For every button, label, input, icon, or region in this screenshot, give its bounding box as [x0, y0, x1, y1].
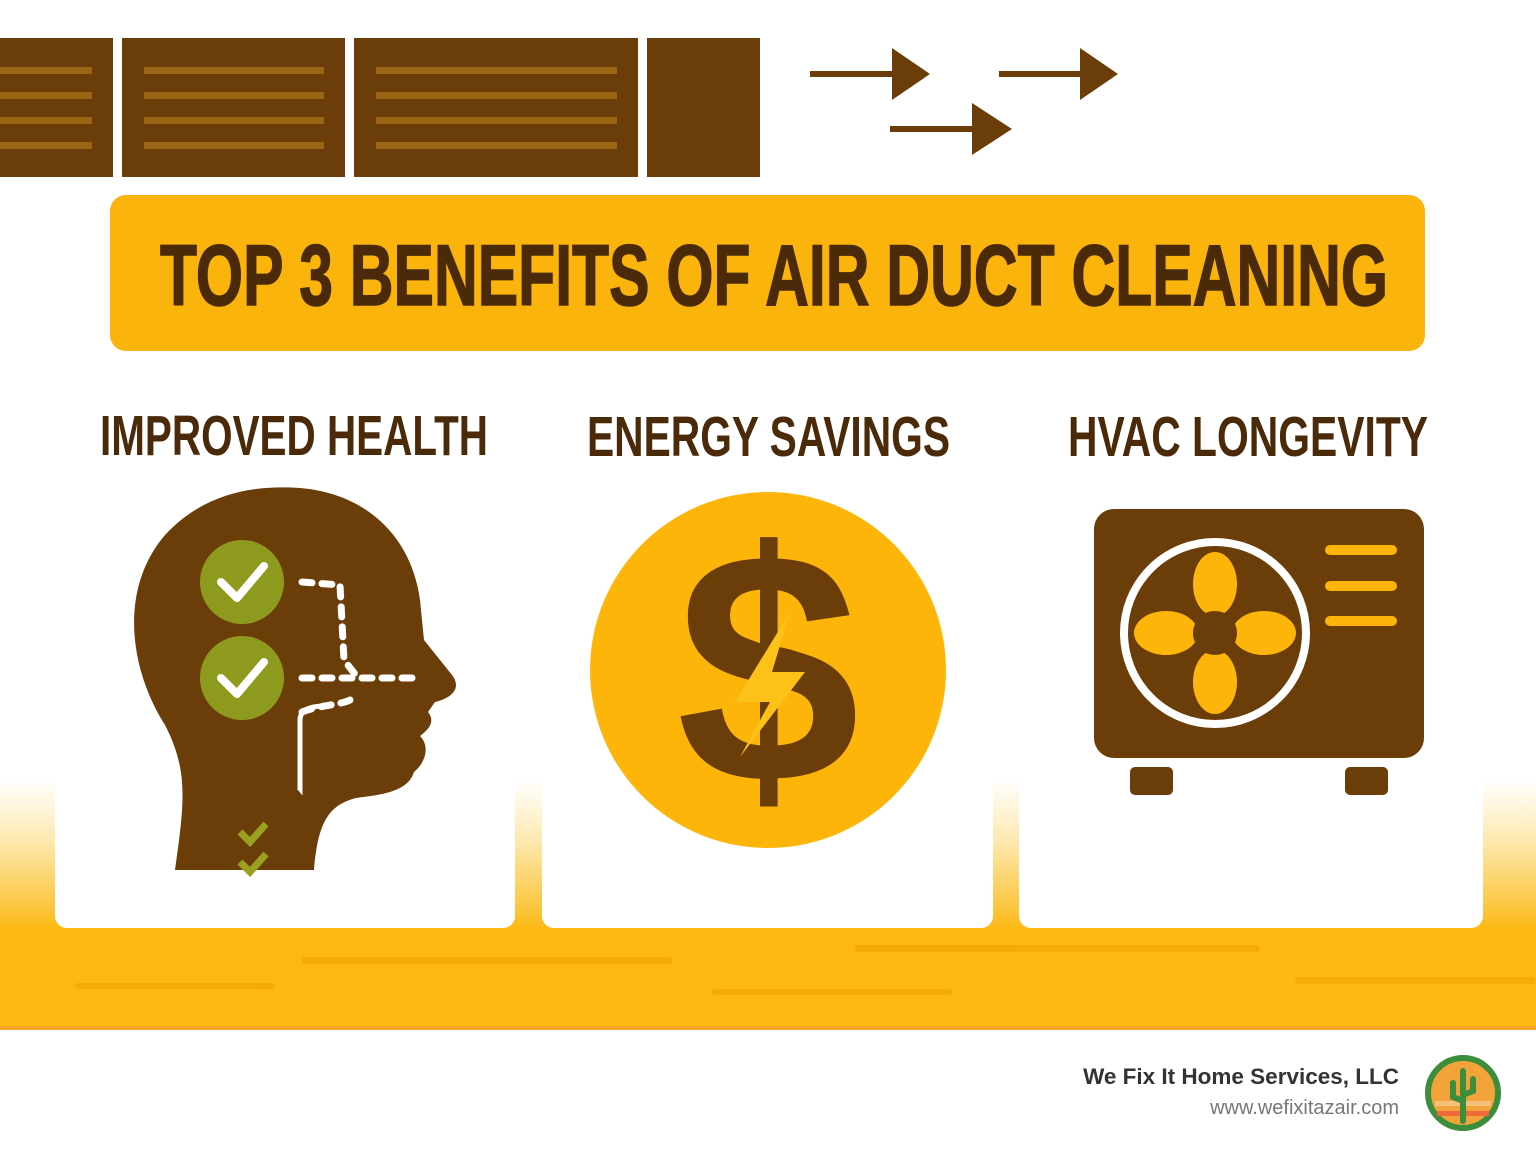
background yellow band — [0, 780, 1536, 1030]
logo — [1425, 1055, 1501, 1131]
arrows — [810, 48, 1118, 155]
icon: dollar coin — [590, 492, 946, 848]
icon: head — [134, 487, 456, 878]
footer text: We Fix It Home Services, LLC — [1083, 1064, 1399, 1089]
card: health — [55, 760, 515, 928]
footer text: www.wefixitazair.com — [1210, 1097, 1399, 1119]
card: energy — [542, 760, 993, 928]
icon: hvac unit — [1094, 509, 1424, 795]
card: hvac — [1019, 760, 1483, 928]
footer text — [1083, 1064, 1399, 1119]
title banner — [110, 195, 1425, 351]
ducts — [0, 38, 760, 177]
